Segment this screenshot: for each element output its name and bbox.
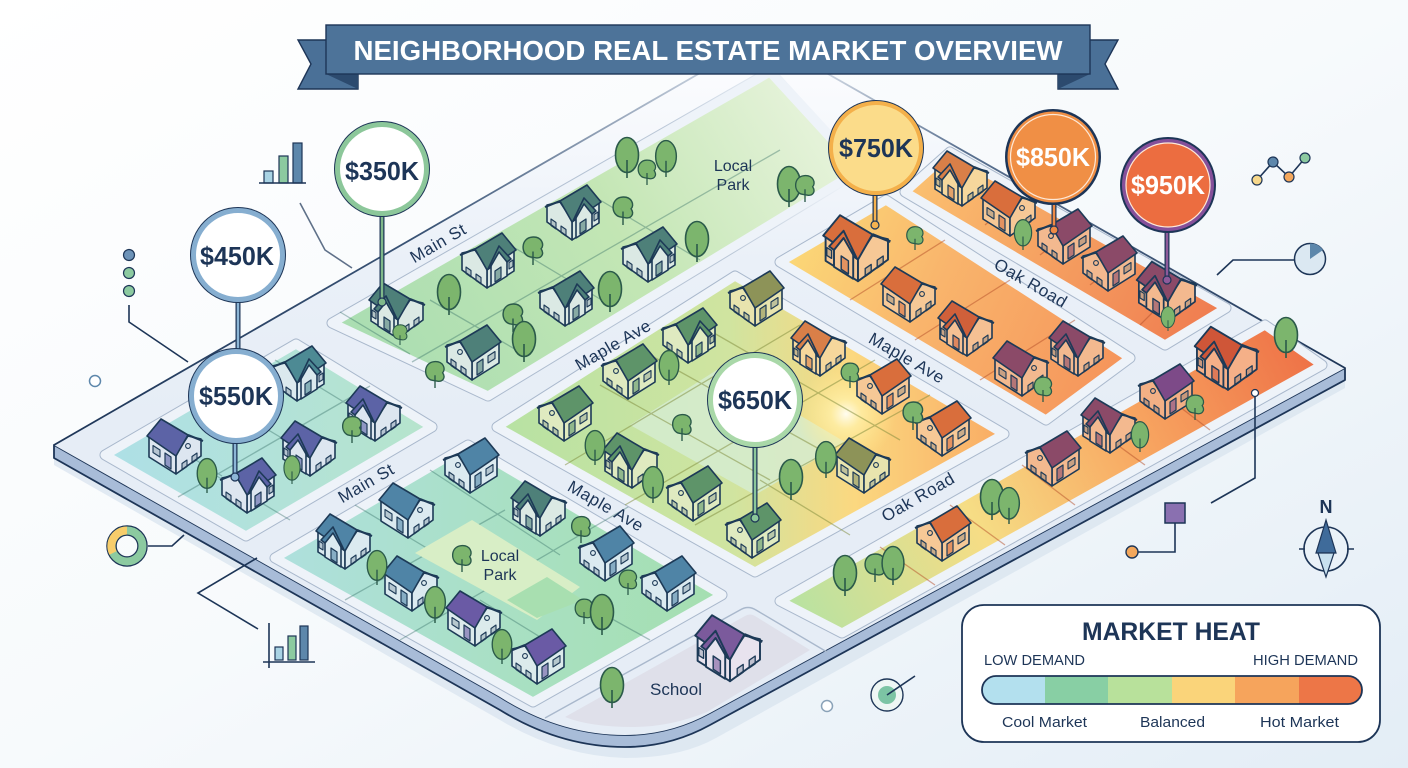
pin: $850K: $850K (1016, 142, 1090, 172)
panel: block F west teal (105, 344, 432, 536)
label: local park: Local (714, 158, 752, 175)
icon: small circle left (90, 376, 100, 386)
house (270, 346, 326, 401)
panel: market heat legend (962, 605, 1380, 742)
house (1081, 398, 1137, 453)
house (1036, 209, 1092, 264)
parcel fill (275, 445, 722, 702)
parcel fill (780, 325, 1322, 633)
label: Oak Road upper: Oak Road (991, 255, 1071, 312)
connector: map to bar chart (198, 558, 258, 629)
panel: block C upper right (780, 200, 1130, 420)
house (220, 458, 276, 513)
trees (585, 351, 923, 503)
house (538, 271, 594, 326)
panel: block E south-east (780, 318, 1322, 633)
house: large orange (823, 215, 890, 281)
house (346, 386, 402, 441)
parcel fill (497, 276, 1004, 572)
trees (834, 318, 1298, 596)
icon: legend dots left (124, 250, 134, 296)
tree (1014, 220, 1032, 250)
panel: block A north-west green (332, 72, 860, 396)
pin: $550K: $550K (199, 381, 273, 411)
right ribbon tail (1058, 40, 1118, 89)
trees (426, 138, 814, 388)
road labels (335, 220, 1071, 536)
panel: block B central (497, 271, 1004, 572)
icon: pie chart (1294, 243, 1326, 274)
pin: $950K: $950K (1131, 170, 1205, 200)
pin: $350K (334, 121, 430, 306)
pin: $450K: $450K (200, 241, 274, 271)
heat scale bar (982, 676, 1362, 704)
house (1137, 262, 1197, 321)
title text: NEIGHBORHOOD REAL ESTATE MARKET OVERVIEW (354, 35, 1063, 66)
house (443, 438, 499, 493)
house (545, 185, 601, 240)
label: local park: Park (717, 177, 750, 194)
park lawn (415, 520, 580, 620)
lot lines (850, 240, 1075, 380)
platform shadow (54, 370, 1345, 758)
label: school: School (650, 680, 702, 699)
lot lines (345, 470, 650, 640)
label: balanced: Balanced (1140, 714, 1205, 731)
house (981, 181, 1037, 236)
icon: target (871, 676, 915, 711)
lot lines (565, 325, 930, 535)
house (1049, 321, 1105, 376)
label: Oak Road lower: Oak Road (878, 469, 958, 526)
house (640, 556, 696, 611)
ribbon body (326, 25, 1090, 74)
trees (197, 417, 361, 493)
icon: compass (1299, 497, 1354, 577)
title banner (298, 25, 1118, 89)
icon: bar chart top-left (259, 143, 306, 183)
center glow (796, 364, 896, 464)
parcel fill (332, 72, 860, 396)
house (621, 227, 677, 282)
house (661, 308, 717, 363)
house (281, 421, 337, 476)
house (938, 301, 994, 356)
house (666, 466, 722, 521)
icon: small circle bottom (822, 700, 832, 712)
label: high demand: HIGH DEMAND (1253, 652, 1358, 669)
house (1195, 327, 1259, 390)
park lawn (630, 368, 845, 495)
trees (367, 517, 637, 664)
pin: $750K: $750K (839, 133, 913, 163)
house (316, 514, 372, 569)
lot lines (340, 150, 780, 362)
parcel fill (780, 200, 1130, 420)
house (791, 321, 847, 376)
house (915, 506, 971, 561)
house (445, 325, 501, 380)
house (835, 438, 891, 493)
platform side (54, 368, 1345, 747)
house (446, 591, 502, 646)
label: local park: Park (484, 567, 517, 584)
house (510, 629, 566, 684)
connector: pie to map (1217, 260, 1294, 275)
lot lines (985, 195, 1180, 325)
house (603, 433, 659, 488)
lot lines (880, 388, 1210, 585)
icon: purple square with orange node (1126, 503, 1185, 558)
house (537, 386, 593, 441)
tree (1161, 307, 1175, 331)
left ribbon tail (298, 40, 358, 89)
panel: block D top right (905, 151, 1226, 345)
platform edge left (54, 50, 740, 445)
lot lines (150, 360, 370, 520)
house (1081, 236, 1137, 291)
curb (545, 608, 827, 718)
house (1138, 364, 1194, 419)
icon: donut chart (111, 530, 142, 562)
house (993, 341, 1049, 396)
lot fill (565, 614, 810, 727)
house (933, 151, 989, 206)
pin: $750K (828, 100, 924, 229)
label: hot market: Hot Market (1260, 714, 1340, 731)
icon: network nodes (1252, 153, 1310, 185)
label: Main St lower: Main St (335, 460, 398, 507)
house (881, 267, 937, 322)
house (915, 401, 971, 456)
house (369, 283, 425, 338)
label: Maple Ave lower: Maple Ave (564, 477, 647, 536)
house (728, 271, 784, 326)
connector: map to purple square (1211, 390, 1258, 503)
panel: school lot (545, 608, 827, 727)
house (578, 526, 634, 581)
house (460, 233, 516, 288)
label: low demand: LOW DEMAND (984, 652, 1085, 669)
house: school (695, 615, 762, 681)
house (601, 344, 657, 399)
tree (600, 668, 624, 708)
pin: $850K (1005, 109, 1101, 234)
house (379, 483, 435, 538)
pin: $650K: $650K (718, 385, 792, 415)
platform edge right (800, 58, 1345, 368)
house (511, 481, 567, 536)
park patch (507, 577, 583, 618)
icon: bar chart bottom-left (263, 623, 315, 668)
house (1025, 431, 1081, 486)
parcel fill (105, 344, 432, 536)
label: Main St upper: Main St (407, 220, 470, 267)
pin: $550K (188, 348, 284, 481)
left fold (326, 74, 358, 89)
pin: $650K (707, 352, 803, 522)
pin: $950K (1120, 137, 1216, 284)
panel: block G south-west (275, 438, 722, 702)
label: Maple Ave center-left: Maple Ave (572, 316, 655, 375)
label: Maple Ave center-right: Maple Ave (865, 329, 948, 388)
icon: compass: N (1320, 497, 1332, 517)
legend heading: MARKET HEAT (1082, 618, 1260, 646)
pin: $450K (190, 207, 286, 350)
label: local park: Local (481, 548, 519, 565)
trees (907, 227, 1052, 402)
right fold (1058, 74, 1090, 89)
tree in front of house (393, 325, 407, 345)
parcel fill (905, 152, 1226, 345)
connector: bar chart to map (300, 203, 352, 268)
house (725, 503, 781, 558)
pin: $350K: $350K (345, 156, 419, 186)
house (855, 359, 911, 414)
connector: dots to map (129, 305, 188, 362)
house (147, 419, 203, 474)
connector: donut to map (148, 535, 184, 546)
house (383, 556, 439, 611)
label: cool market: Cool Market (1002, 714, 1088, 731)
